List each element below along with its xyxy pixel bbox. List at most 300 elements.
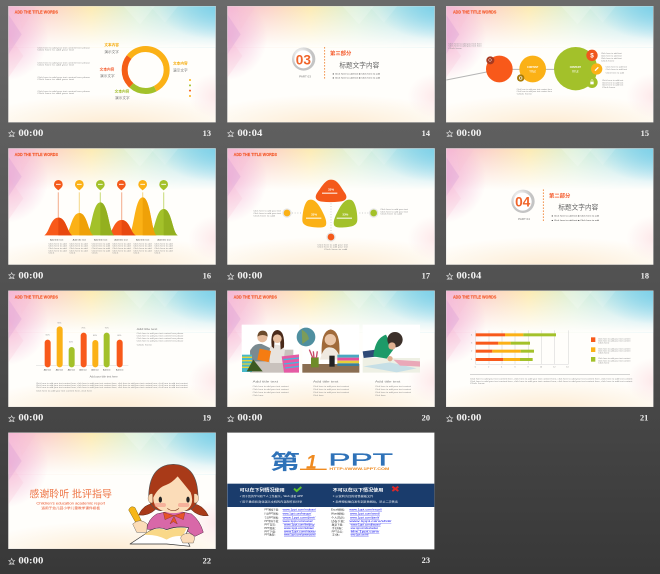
- link list right: www.1ppt.com/shiti/: [349, 520, 392, 523]
- photo captions: Click here to add your text content: [313, 391, 350, 394]
- slide 16 footer: [9, 270, 211, 280]
- slide 15 text blocks: Click here to add text: [602, 81, 624, 84]
- connector line: [446, 69, 555, 80]
- axis labels: 6: [514, 366, 516, 368]
- bar values: 60%: [46, 335, 50, 337]
- link list left: www.1ppt.com/moban/: [283, 509, 316, 512]
- slide 14 footer: [228, 128, 431, 138]
- column captions: Click here to add: [112, 249, 131, 252]
- chart legend: Click here to add your text content: [598, 357, 631, 360]
- paragraph: [470, 378, 633, 385]
- photo captions: Click here to add your text content: [375, 385, 412, 388]
- axis labels: 4: [501, 366, 503, 368]
- column captions: Click here to add: [133, 245, 152, 248]
- section heading: 第二部分: [549, 191, 571, 199]
- yellow circle: TITLE: [529, 71, 536, 73]
- petal captions: Click here to add your text: [317, 243, 349, 246]
- link list left: [264, 508, 316, 537]
- slide 15 text blocks: Click here: [602, 86, 617, 89]
- column captions: Click: [69, 252, 75, 254]
- slide 15 title: ADD THE TITLE WORDS: [453, 10, 497, 16]
- section bullet lines: ■ Click here to add text ■ Click here to add: [552, 219, 599, 222]
- slide 20 footer: [228, 413, 430, 423]
- node: green: [369, 208, 378, 218]
- divider rule: [470, 373, 630, 375]
- ears: [148, 494, 199, 503]
- white slide: [227, 433, 434, 549]
- paragraph: Click here: [470, 382, 486, 385]
- slide 14 footer: 14: [422, 129, 431, 138]
- slide 15 footer: [447, 128, 649, 138]
- open book: [130, 527, 190, 546]
- column captions: Click: [112, 252, 118, 254]
- link list right: 个人简历：: [331, 515, 347, 519]
- icon: gear badge: [517, 74, 524, 82]
- number badge 03: [292, 47, 315, 71]
- slide 15 text blocks: Click here to add text: [602, 79, 624, 82]
- axis labels: [471, 334, 569, 368]
- bar categories: Add text: [91, 369, 99, 372]
- slide 21 title: ADD THE TITLE WORDS: [453, 294, 497, 300]
- column captions: Add title text: [73, 239, 87, 242]
- slide 13 left text lines: Click here to add your text: [37, 78, 75, 81]
- link list left: PPT图表：: [264, 526, 278, 530]
- dashed divider: [542, 189, 545, 222]
- side text: Click here to add your text content here please: [137, 335, 184, 338]
- link list left: www.1ppt.com/beijing/: [284, 524, 315, 527]
- link list right: www.1ppt.com/jiaoan/: [351, 524, 381, 527]
- donut labels: 演示文字: [115, 95, 130, 100]
- bar values: 90%: [57, 322, 62, 324]
- hair back: [149, 464, 198, 511]
- green circle: [554, 47, 597, 90]
- photo: girl with globe: [297, 325, 359, 373]
- face: [153, 476, 192, 513]
- photo captions: Click here to add your text content: [253, 388, 289, 391]
- axis labels: 2: [488, 366, 489, 368]
- link list right: 试卷下载：: [331, 519, 347, 523]
- left hand: [133, 521, 147, 532]
- donut labels: 文本内容: [100, 66, 115, 71]
- slide 22 footer: 00:00: [18, 555, 44, 565]
- yellow circle: [519, 56, 546, 82]
- petal: yellow: [302, 200, 326, 228]
- photo captions: Click here to add your text content: [253, 391, 289, 394]
- slide 15 text blocks: Click here to add text: [606, 68, 628, 71]
- axis labels: 1: [471, 359, 472, 361]
- column captions: Click here to add: [133, 242, 152, 245]
- section bullet lines: ■ Click here to add text ■ Click here to add: [333, 77, 380, 80]
- chart legend: Click here to add your text content: [598, 350, 631, 353]
- slide 18 footer: 00:04: [456, 270, 482, 280]
- bar categories: Add text: [56, 369, 63, 372]
- prohibited uses: [333, 486, 399, 504]
- bow: [163, 512, 185, 524]
- logo: PPT: [328, 450, 394, 470]
- icon: dollar badge: $: [590, 53, 594, 60]
- allowed uses: √ 用于您的学习和个人工作展示，Web 或者 APP: [240, 494, 304, 498]
- english subtitle: Children's education academic report: [36, 502, 105, 506]
- slide 13 footer: 00:00: [18, 128, 44, 138]
- part label: PART 03: [299, 74, 311, 78]
- column captions: Click here to add: [92, 247, 110, 250]
- link list right: www.1ppt.com/shouchaobao/: [351, 527, 378, 530]
- paragraph below chart: [36, 382, 188, 392]
- logo: 第: [270, 451, 300, 474]
- slide 13 left text lines: [37, 47, 91, 95]
- bar values: 60%: [117, 335, 122, 337]
- photo: two children with books: [242, 325, 299, 373]
- chart grid: [476, 330, 568, 364]
- column captions: Click: [154, 252, 160, 254]
- side text: Click here to add your text content here please: [137, 340, 184, 343]
- prohibited uses: × 以营利为目的转售模板文件: [333, 494, 374, 498]
- column captions: Click here to add: [112, 242, 131, 245]
- petal captions: Click here to add: [380, 213, 402, 216]
- navy band: [227, 484, 434, 507]
- section bullet lines: ■ Click here to add text ■ Click here to add: [333, 72, 380, 75]
- photo captions: Click here to add your text content: [375, 388, 412, 391]
- slide 16 footer: 00:00: [18, 270, 44, 280]
- eye right: [186, 497, 190, 503]
- axis line: [36, 364, 128, 366]
- mouth: [167, 508, 179, 511]
- green circle: TITLE: [572, 71, 579, 73]
- slide 16 title: ADD THE TITLE WORDS: [15, 152, 59, 158]
- link list left: 行业PPT模板：: [264, 512, 280, 516]
- column captions: Add title text: [136, 239, 150, 242]
- slide 15 text blocks: Click here to add your text content here: [517, 90, 553, 93]
- slide 15 text blocks: Click here to add text: [606, 65, 628, 68]
- slide 19 footer: 00:00: [18, 413, 44, 423]
- slide 23: 1PPT info page: [227, 433, 434, 565]
- bar values: 60%: [93, 335, 97, 337]
- side text: Click here to add your text content here please: [137, 332, 184, 335]
- petal: orange: 33%: [328, 188, 334, 192]
- axis labels: 4: [471, 334, 473, 336]
- right hand: [181, 533, 195, 543]
- petal captions: Click here to add your text: [317, 246, 349, 249]
- slide number: 23: [422, 556, 430, 565]
- photo captions: Click here: [313, 394, 325, 397]
- column captions: Click here to add: [69, 245, 88, 248]
- slide 21 footer: 21: [640, 414, 648, 423]
- photo captions: Click here: [375, 394, 387, 397]
- chart legend: Click here to add your text content: [598, 337, 631, 340]
- slide 15 text blocks: Click here to add text: [602, 84, 624, 87]
- link list left: 节日PPT模板：: [264, 515, 280, 519]
- column captions: Click here to add: [112, 245, 131, 248]
- allowed uses: √ 用于教育和商业演示文档的内容制作和分享: [240, 500, 303, 504]
- axis labels: 14: [566, 366, 569, 368]
- slide 17 footer: 17: [422, 271, 430, 280]
- link list right: www.1ppt.com/excel/: [349, 509, 383, 512]
- link list right: Word模板：: [331, 512, 347, 516]
- slide 20 title: ADD THE TITLE WORDS: [234, 294, 278, 300]
- slide 21 footer: [447, 413, 648, 423]
- photo captions: [253, 381, 412, 397]
- slide 22 footer: 22: [203, 556, 211, 565]
- rounded bars: [45, 326, 123, 367]
- paragraph: Click here to add your text content here, click here to add your text content here, click here to add your text content here, click here to add text content: [470, 378, 633, 381]
- slide 15 text blocks: Click here to add your text here: [448, 42, 483, 45]
- bar categories: Add text: [68, 369, 75, 372]
- link list left: www.1ppt.com/hangye/: [283, 513, 312, 516]
- bar categories: Add text: [103, 369, 111, 372]
- slide 19 footer: 19: [203, 414, 211, 423]
- link list right: Excel模板：: [331, 508, 347, 512]
- column captions: Click here to add: [154, 245, 173, 248]
- slide 13 left text lines: Click here to add your text: [37, 63, 75, 66]
- link list right: www.1ppt.com/word/: [350, 513, 380, 516]
- petal captions: Click here to add your text: [253, 210, 282, 213]
- paragraph below chart: Click here to add your text content here, click here to add your text content here, click here to add your text content here, click here to add text content: [36, 386, 188, 389]
- prohibited uses: 不可以在以下情况使用: [333, 486, 383, 493]
- column captions: Click here to add: [133, 247, 152, 250]
- link list left: PPT下载：: [264, 529, 278, 533]
- axis labels: 3: [471, 343, 473, 345]
- section subtitle: 标题文字内容: [339, 60, 380, 69]
- slide 13 left text lines: Click here to add your text content here please: [37, 90, 91, 93]
- link list left: www.1ppt.com/powerpoint/: [284, 534, 316, 537]
- petal captions: Click here to add your text: [380, 208, 409, 211]
- pencil: [129, 507, 144, 529]
- link list right: PPT论坛：: [332, 529, 345, 533]
- donut labels: 演示文字: [100, 73, 115, 78]
- side text: Click here to add your text content here please: [137, 337, 184, 340]
- slide 22 footer: [9, 555, 211, 565]
- petal captions: [253, 208, 409, 251]
- petal: green: 33%: [342, 213, 349, 217]
- slide 15 text blocks: Click here to add: [606, 72, 624, 75]
- slide 13 title: ADD THE TITLE WORDS: [15, 10, 59, 16]
- photo captions: Add title text: [253, 381, 279, 384]
- bell curves: [44, 197, 178, 235]
- donut labels: 文本内容: [104, 42, 119, 47]
- slide 19 footer: [9, 413, 211, 423]
- photo captions: Click here: [253, 394, 264, 397]
- bar values: [46, 322, 122, 344]
- column captions: Click here to add: [48, 249, 67, 252]
- link list right: 手抄报：: [332, 526, 345, 530]
- column captions: Click here to add: [69, 247, 88, 250]
- link list left: PPT教程：: [264, 533, 277, 537]
- slide 18 footer: [447, 270, 649, 280]
- slide 15 text blocks: Click here to add text: [601, 52, 622, 55]
- petal captions: Click here to add: [253, 214, 275, 217]
- slide 15 footer: 00:00: [456, 128, 482, 138]
- slide 14 footer: 00:04: [237, 128, 263, 138]
- slide 15 footer: 15: [641, 129, 649, 138]
- photo: boy drawing: [363, 325, 420, 373]
- slide 15 text blocks: Click here to add your text content here: [517, 88, 553, 91]
- slide 13 left text lines: Click here to add your text: [37, 92, 75, 95]
- side text: [137, 328, 184, 346]
- slide 17 title: ADD THE TITLE WORDS: [234, 152, 278, 158]
- column captions: Click here to add: [92, 245, 110, 248]
- chinese subtitle: 适用于幼儿园小学儿童教学课件模板: [41, 505, 100, 510]
- slide 13 left text lines: Click here to add your text content here please: [37, 76, 91, 79]
- petal captions: Click here to add your text: [253, 212, 282, 215]
- allowed uses: [240, 486, 304, 504]
- column captions: Click here to add: [133, 249, 152, 252]
- map pins: [54, 180, 168, 190]
- column captions: Click: [133, 252, 139, 254]
- slide 16: bell curve chart: [0, 122, 272, 300]
- paragraph: Click here to add your text content here, click here to add your text content here, click here to add your text content here, click here to add text content: [470, 380, 633, 383]
- slide 15 text blocks: Click here: [601, 59, 616, 62]
- section bullet lines: [333, 72, 380, 80]
- allowed uses: 可以在下列情况使用: [240, 486, 285, 493]
- bar categories: Add text: [44, 369, 51, 372]
- slide 13 left text lines: Click here to add your text: [37, 49, 75, 52]
- petal: green: [334, 200, 357, 228]
- icon: dollar badge: [586, 50, 598, 61]
- chart title: Add your title text here: [90, 376, 119, 379]
- chart legend: Click here: [598, 342, 610, 345]
- slide 20 footer: 20: [422, 414, 430, 423]
- column captions: Click here to add: [154, 247, 173, 250]
- donut labels: 演示文字: [104, 49, 119, 54]
- column captions: Click here to add: [48, 242, 67, 245]
- link list left: www.1ppt.com/jieri/: [283, 516, 316, 519]
- paragraph below chart: Click here to add your text content here, click here to add your text content here, click here to add your text content here, click here to add text content: [36, 382, 188, 385]
- donut chart: [125, 49, 167, 91]
- slide 22: thank-you slide: [0, 406, 272, 574]
- side text: Click here: [137, 343, 154, 346]
- node: orange: [326, 232, 336, 242]
- pigtail right: [191, 504, 208, 516]
- icon: red cross: [392, 487, 398, 491]
- pigtail left: [139, 504, 156, 515]
- section subtitle: 标题文字内容: [558, 202, 599, 211]
- column captions: Click: [48, 252, 54, 254]
- slide 21: stacked bar chart: [399, 264, 660, 442]
- number badge 04: 04: [515, 195, 531, 210]
- photo captions: Click here to add your text content: [313, 388, 350, 391]
- chart legend: Click here to add your text content: [598, 359, 631, 362]
- link list left: www.1ppt.com/tubiao/: [284, 527, 314, 530]
- stacked bars: [476, 333, 556, 361]
- icon: search badge: [486, 56, 494, 64]
- slide 16 footer: 16: [203, 271, 211, 280]
- petal: yellow: 33%: [311, 213, 317, 217]
- slide 13 footer: 13: [203, 129, 211, 138]
- column captions: Click here to add: [154, 249, 173, 252]
- thank-you heading: 感谢聆听 批评指导: [29, 488, 112, 501]
- donut labels: 演示文字: [173, 67, 188, 72]
- bar values: 75%: [105, 328, 109, 330]
- column captions: Click here to add: [69, 242, 88, 245]
- slide 15: circle timeline: [399, 0, 660, 158]
- number badge 04: [511, 190, 535, 213]
- slide 15 text blocks: Click here to add your text here: [448, 45, 483, 48]
- paragraph below chart: Click here to add your text content here, click here: [36, 389, 93, 392]
- section bullet lines: ■ Click here to add text ■ Click here to add: [552, 215, 599, 218]
- column captions: Click: [92, 252, 98, 254]
- part label: PART 04: [518, 217, 530, 221]
- column captions: Click here to add: [48, 245, 67, 248]
- axis labels: 10: [540, 366, 543, 368]
- slide 14: section divider 03: [181, 0, 491, 158]
- column captions: [48, 239, 173, 254]
- slide 20 footer: 00:00: [237, 413, 263, 423]
- axis labels: 8: [527, 366, 529, 368]
- link list left: PPT素材下载：: [264, 519, 280, 523]
- column captions: Add title text: [157, 239, 171, 242]
- green circle: CONTENT: [570, 67, 582, 69]
- dotted axes: [292, 203, 369, 232]
- donut labels: 文本内容: [115, 88, 130, 93]
- photo captions: Click here to add your text content: [313, 385, 350, 388]
- column captions: Add title text: [114, 239, 128, 242]
- column captions: Add title text: [50, 239, 64, 242]
- bar values: 30%: [69, 342, 73, 344]
- slide 15 text blocks: Click here: [448, 47, 463, 50]
- logo: 1: [306, 452, 317, 473]
- column captions: Add title text: [94, 239, 108, 242]
- slide 17 footer: 00:00: [237, 270, 263, 280]
- column captions: Click here to add: [112, 247, 131, 250]
- slide 13: donut chart: [0, 0, 272, 158]
- axis labels: 2: [471, 351, 472, 353]
- donut labels: [100, 42, 188, 100]
- axis labels: 12: [553, 366, 555, 368]
- chart legend: [591, 337, 631, 365]
- slide 13 left text lines: Click here to add your text content here please: [37, 61, 91, 64]
- prohibited uses: × 未经授权擅自发布到其他网站，禁止二次售卖: [333, 500, 399, 504]
- logo: HTTP://WWW.1PPT.COM: [329, 467, 390, 471]
- section bullet lines: [552, 215, 599, 222]
- bar values: 75%: [81, 328, 86, 330]
- body: [147, 511, 203, 536]
- donut legend: [189, 79, 191, 97]
- orange circle: [486, 56, 513, 82]
- column captions: Click here to add: [48, 247, 67, 250]
- slide 19 title: ADD THE TITLE WORDS: [15, 294, 59, 300]
- link list right: [331, 508, 392, 537]
- slide 19: column chart: [0, 264, 272, 442]
- axis labels: 0: [475, 366, 477, 368]
- link list left: PPT背景：: [264, 523, 278, 527]
- photo captions: Click here to add your text content: [253, 385, 289, 388]
- eyes: [159, 497, 162, 503]
- column captions: Click here to add: [154, 242, 173, 245]
- slide 18 footer: 18: [641, 271, 649, 280]
- petal captions: Click here to add: [324, 248, 347, 251]
- link list right: 教案下载：: [332, 523, 345, 527]
- icon: pencil badge: [591, 63, 602, 75]
- chart legend: Click here: [598, 362, 610, 365]
- photo captions: Add title text: [313, 381, 339, 384]
- logo: [270, 450, 394, 474]
- slide 13 footer: [9, 128, 211, 138]
- bar categories: Add text: [79, 369, 87, 372]
- link list left: www.1ppt.com/sucai/: [283, 520, 313, 523]
- petal: orange: [316, 180, 346, 202]
- node: yellow: [282, 208, 292, 218]
- petal captions: Click here to add your text: [380, 210, 409, 213]
- slide 15 text blocks: [448, 42, 628, 95]
- slide 15 text blocks: Click here: [517, 92, 534, 95]
- section heading: 第三部分: [330, 49, 352, 57]
- book pages: [144, 528, 187, 540]
- slide 21 footer: 00:00: [456, 413, 482, 423]
- yellow circle: CONTENT: [527, 67, 539, 69]
- pin stems: [58, 192, 164, 220]
- column captions: Click here to add: [69, 249, 88, 252]
- link list right: 字体：: [332, 533, 342, 537]
